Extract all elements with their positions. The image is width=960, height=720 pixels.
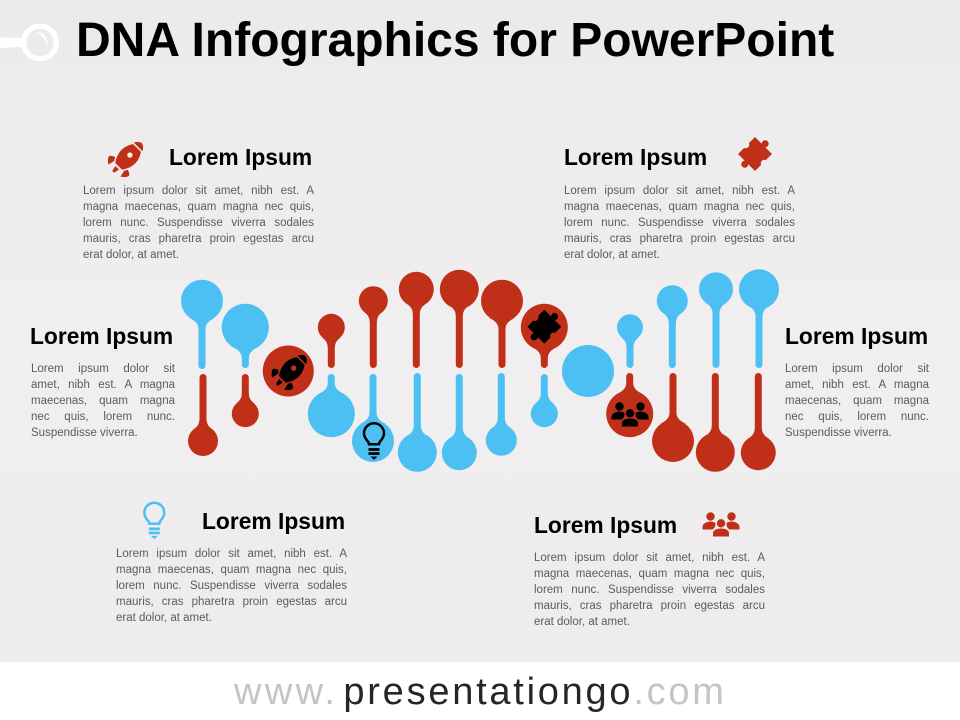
body text: mauris, cras pharetra proin egestas arcu [564, 233, 795, 245]
body text: mauris, cras pharetra proin egestas arcu [116, 596, 347, 608]
body text: Lorem ipsum dolor sit [31, 363, 175, 375]
strand pair 12 [652, 285, 694, 462]
body text [534, 552, 765, 628]
heading: Lorem Ipsum [785, 323, 928, 349]
title: DNA Infographics for PowerPoint [76, 14, 834, 67]
logo: white ring with handle [0, 24, 59, 62]
strand pair 14 [739, 269, 779, 470]
body text: nec quis, lorem nunc. [31, 411, 175, 423]
strand pair 8 [481, 280, 523, 456]
footer url: www.presentationgo.com [234, 671, 727, 713]
heading: Lorem Ipsum [564, 144, 707, 170]
panel: bottom left [116, 502, 347, 624]
heading: Lorem Ipsum [30, 323, 173, 349]
body text: Lorem ipsum dolor sit amet, nibh est. A [534, 552, 765, 564]
icon: people [702, 512, 740, 536]
strand pair 2 [222, 304, 269, 427]
body text [785, 363, 929, 439]
body text: mauris, cras pharetra proin egestas arcu [83, 233, 314, 245]
panel: top right [564, 137, 795, 261]
panel: middle left [30, 323, 175, 439]
body text: maecenas, quam magna [31, 395, 175, 407]
body text: lorem nunc. Suspendisse viverra sodales [534, 584, 765, 596]
strand pair 13 [696, 272, 735, 472]
body text: lorem nunc. Suspendisse viverra sodales [564, 217, 795, 229]
body text: nec quis, lorem nunc. [785, 411, 929, 423]
strand pair 6 [398, 272, 437, 472]
body text: Suspendisse viverra. [31, 427, 138, 439]
heading: Lorem Ipsum [169, 144, 312, 170]
body text: Lorem ipsum dolor sit amet, nibh est. A [116, 548, 347, 560]
icon: rocket [108, 142, 144, 178]
strand pair 5 with bulb icon [352, 286, 394, 462]
body text: magna maecenas, quam magna nec quis, [116, 564, 347, 576]
body text [116, 548, 347, 624]
panel: top left [83, 142, 314, 261]
body text [564, 185, 795, 261]
body text [83, 185, 314, 261]
strand pair 4 [308, 314, 355, 437]
body text: magna maecenas, quam magna nec quis, [534, 568, 765, 580]
body text: amet, nibh est. A magna [31, 379, 175, 391]
body text: maecenas, quam magna [785, 395, 929, 407]
heading: Lorem Ipsum [534, 512, 677, 538]
body text: Suspendisse viverra. [785, 427, 892, 439]
body text: erat dolor, at amet. [564, 249, 660, 261]
body text: magna maecenas, quam magna nec quis, [564, 201, 795, 213]
icon: light bulb [143, 502, 166, 540]
body text: amet, nibh est. A magna [785, 379, 929, 391]
body text [31, 363, 175, 439]
heading: Lorem Ipsum [202, 508, 345, 534]
body text: erat dolor, at amet. [534, 616, 630, 628]
body text: magna maecenas, quam magna nec quis, [83, 201, 314, 213]
strand pair 7 [440, 270, 479, 470]
node with rocket icon [263, 346, 316, 396]
panel: middle right [785, 323, 929, 439]
body text: lorem nunc. Suspendisse viverra sodales [83, 217, 314, 229]
body text: Lorem ipsum dolor sit amet, nibh est. A [564, 185, 795, 197]
node: blue circle [562, 345, 614, 397]
body text: lorem nunc. Suspendisse viverra sodales [116, 580, 347, 592]
strand pair 9 with puzzle icon [521, 304, 568, 427]
panel: bottom right [534, 512, 765, 628]
body text: erat dolor, at amet. [83, 249, 179, 261]
body text: mauris, cras pharetra proin egestas arcu [534, 600, 765, 612]
strand pair 11 with people icon [606, 314, 653, 437]
body text: Lorem ipsum dolor sit amet, nibh est. A [83, 185, 314, 197]
strand pair 1 [181, 280, 223, 456]
body text: erat dolor, at amet. [116, 612, 212, 624]
body text: Lorem ipsum dolor sit [785, 363, 929, 375]
icon: puzzle [738, 137, 772, 171]
DNA helix chart [181, 269, 779, 472]
